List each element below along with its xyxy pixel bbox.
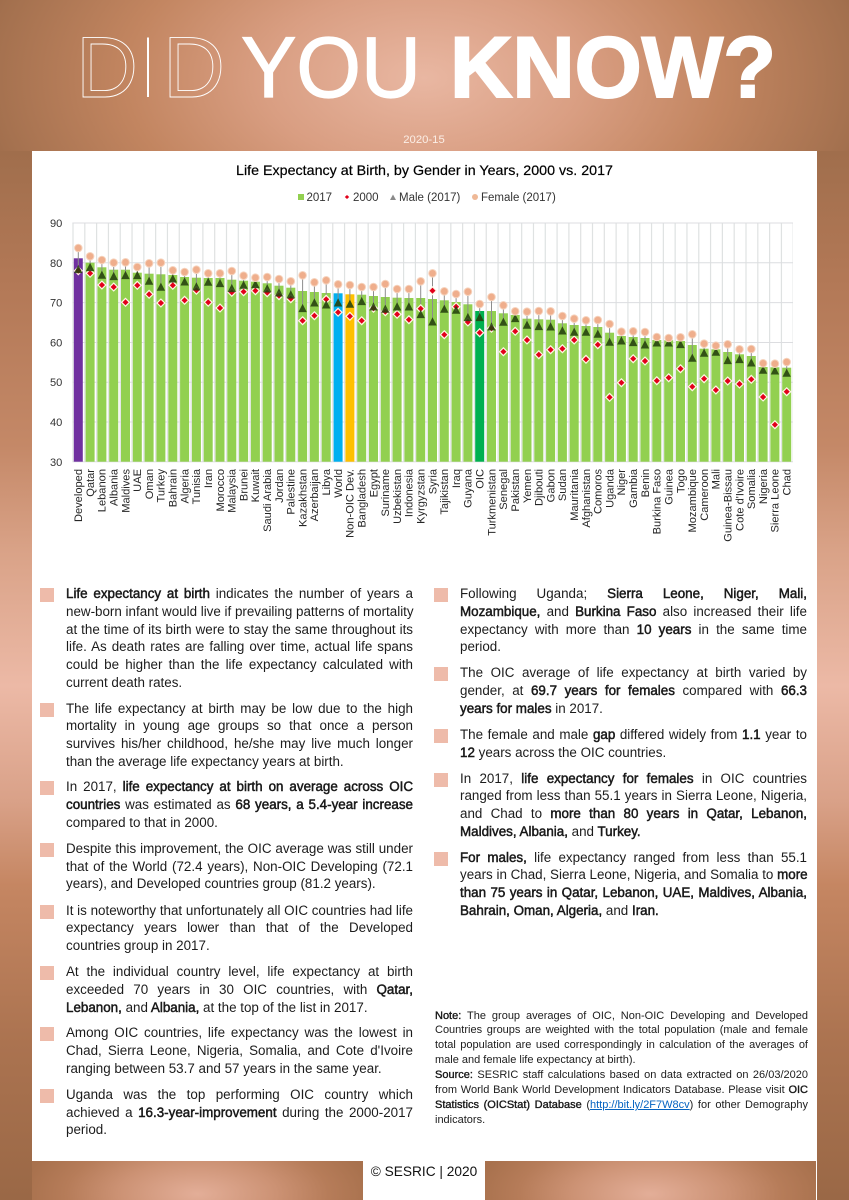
text block: following Uganda: expectancy with more than 10 years in the same time	[460, 622, 807, 637]
column: Bahrain	[168, 266, 177, 462]
x axis country labels: Cameroon	[699, 469, 711, 521]
column: Iraq	[452, 290, 461, 462]
x axis country labels: UAE	[132, 469, 144, 492]
column: Uganda	[605, 320, 614, 462]
footer credit: © SESRIC | 2020	[371, 1164, 477, 1179]
column: World	[334, 280, 343, 462]
text block: young age mortality: than the average life expectancy years at birth.	[66, 754, 344, 769]
x axis country labels: Chad	[782, 469, 794, 496]
text block: following Uganda: Following Uganda; Sierra Leone, Niger, Mali,	[460, 586, 807, 601]
chart title: Life Expectancy at Birth, by Gender in Years, 2000 vs. 2017	[236, 162, 613, 178]
text block: lowest countries: ranging between 53.7 and 57 years in the same year.	[66, 1061, 382, 1076]
text block: following Uganda: period.	[460, 639, 501, 654]
column: Egypt	[369, 283, 378, 462]
text block: young age mortality: mortality in young age groups so that once a person	[66, 718, 413, 733]
x axis country labels: Algeria	[179, 468, 191, 504]
column: Comoros	[593, 316, 602, 462]
note and source: total population are used correspondingly in calculation of the averages of	[435, 1039, 808, 1051]
x axis country labels: Egypt	[368, 469, 380, 497]
text block: following Uganda	[434, 586, 807, 654]
bars and markers	[74, 244, 791, 462]
x axis country labels: OIC	[474, 469, 486, 489]
text block: lowest countries	[40, 1025, 413, 1076]
x axis country labels: Suriname	[380, 469, 392, 516]
x axis country labels: Nigeria	[758, 468, 770, 504]
column: Malaysia	[227, 267, 236, 462]
x axis country labels: Palestine	[286, 469, 298, 515]
column: Albania	[109, 259, 118, 462]
column: Kazakhstan	[298, 272, 307, 462]
text block: gender average	[434, 665, 807, 716]
note and source: indicators.	[435, 1114, 485, 1126]
column: Somalia	[747, 345, 756, 462]
x axis country labels: Somalia	[746, 468, 758, 509]
x axis country labels: Guinea-Bissau	[722, 469, 734, 542]
column: Syria	[428, 270, 437, 462]
x axis country labels	[73, 468, 794, 542]
column: Sudan	[558, 312, 567, 462]
legend: Female (2017)	[481, 192, 556, 204]
column: Mauritania	[570, 315, 579, 462]
column: Tunisia	[192, 266, 201, 462]
text block: females: and Chad to more than 80 years in Qatar, Lebanon,	[460, 806, 807, 821]
text block: definition: at the time of its birth were to stay the same throughout its	[66, 622, 413, 637]
column: Uzbekistan	[393, 285, 402, 462]
column: Chad	[782, 358, 791, 462]
x axis country labels: Mali	[711, 469, 723, 489]
text block: gender gap	[434, 727, 807, 760]
x axis country labels: Mauritania	[569, 468, 581, 521]
text block: lower than developed: countries group in 2017.	[66, 938, 210, 953]
y axis labels: 60	[50, 338, 62, 350]
x axis country labels: Gambia	[628, 468, 640, 508]
column: Cote d'Ivoire	[735, 346, 744, 462]
column: Sierra Leone	[770, 360, 779, 462]
text block: males: than 75 years in Qatar, Lebanon, UAE, Maldives, Albania,	[460, 885, 807, 900]
x axis country labels: Afghanistan	[581, 469, 593, 528]
x axis country labels: Pakistan	[510, 469, 522, 512]
column: UAE	[133, 263, 142, 462]
title: I	[145, 20, 151, 116]
title: D	[76, 20, 138, 116]
title: YOU	[241, 20, 421, 116]
y axis labels: 50	[50, 377, 62, 389]
text block: males	[434, 850, 808, 918]
text block: group comparison: Despite this improvement, the OIC average was still under	[66, 841, 413, 856]
column: Senegal	[499, 302, 508, 462]
text block: definition: life. As death rates are falling over time, actual life spans	[66, 639, 413, 654]
note and source	[435, 1010, 808, 1126]
x axis country labels: Malaysia	[227, 468, 239, 513]
column: Bangladesh	[357, 283, 366, 462]
x axis country labels: Yemen	[522, 469, 534, 503]
text block: country level: At the individual country level, life expectancy at birth	[66, 964, 413, 979]
column: Turkey	[156, 259, 165, 462]
x axis country labels: Tunisia	[191, 468, 203, 504]
column: OIC	[475, 300, 484, 462]
x axis country labels: Uzbekistan	[392, 469, 404, 524]
column: Cameroon	[700, 340, 709, 462]
text block: males: years in Chad, Sierra Leone, Nigeria, and Somalia to more	[460, 867, 808, 882]
text block: group comparison: that of the World (72.4 years), Non-OIC Developing (72.1	[66, 859, 413, 874]
x axis country labels: Indonesia	[404, 468, 416, 517]
x axis country labels: Brunei	[238, 469, 250, 501]
text block: Uganda: achieved a 16.3-year-improvement during the 2000-2017	[66, 1105, 413, 1120]
right side strip	[817, 151, 849, 1200]
column: Gambia	[629, 328, 638, 462]
column: Djibouti	[534, 307, 543, 462]
x axis country labels: Tajikistan	[439, 469, 451, 515]
x axis country labels: Turkmenistan	[486, 469, 498, 536]
x axis country labels: Iraq	[451, 469, 463, 488]
column: Brunei	[239, 272, 248, 462]
note and source: from World Bank World Development Indicators Database. Please visit OIC	[435, 1084, 808, 1096]
x axis country labels: Iran	[203, 469, 215, 488]
legend: 2000	[353, 192, 379, 204]
x axis country labels: Syria	[427, 468, 439, 494]
column: Kuwait	[251, 274, 260, 462]
note and source: Note: The group averages of OIC, Non-OIC Developing and Developed	[435, 1010, 808, 1022]
x axis country labels: Non-OIC Dev.	[345, 469, 357, 538]
column: Non-OIC Dev.	[345, 281, 354, 462]
text block: definition: could be higher than the life expectancy calculated with	[66, 657, 413, 672]
x axis country labels: Bahrain	[168, 469, 180, 507]
y axis labels: 70	[50, 298, 62, 310]
x axis country labels: Comoros	[593, 469, 605, 514]
x axis country labels: Djibouti	[534, 469, 546, 506]
footer band left	[32, 1161, 363, 1200]
column: Iran	[204, 270, 213, 462]
x axis country labels: Benin	[640, 469, 652, 497]
text block: lower than developed: expectancy years lower than that of the Developed	[66, 920, 413, 935]
x axis country labels: World	[333, 469, 345, 498]
text block: lowest countries: Among OIC countries, life expectancy was the lowest in	[66, 1025, 413, 1040]
x axis country labels: Albania	[108, 468, 120, 506]
column: Guinea-Bissau	[723, 340, 732, 462]
text block: OIC average: In 2017, life expectancy at birth on average across OIC	[66, 779, 413, 794]
column: Lebanon	[97, 256, 106, 462]
text block: gender gap: The female and male gap differed widely from 1.1 year to	[460, 727, 807, 742]
text block: definition: current death rates.	[66, 675, 182, 690]
column: Morocco	[216, 270, 224, 462]
column: Togo	[676, 334, 685, 462]
title: KNOW?	[450, 20, 776, 116]
column: Libya	[322, 276, 331, 462]
text block: group comparison	[40, 841, 413, 891]
y axis labels: 90	[50, 218, 62, 230]
column: Indonesia	[404, 285, 413, 462]
note and source: Statistics (OICStat) Database (http://bit.ly/2F7W8cv) for other Demography	[435, 1099, 808, 1111]
text block: males: Bahrain, Oman, Algeria, and Iran.	[460, 903, 659, 918]
x axis country labels: Guinea	[664, 468, 676, 505]
column: Mali	[711, 342, 720, 462]
text block: Uganda: period.	[66, 1122, 107, 1137]
note and source: Countries groups are weighted with the total population (male and female	[435, 1024, 808, 1036]
footer credit	[363, 1161, 485, 1200]
text block: young age mortality: survives his/her childhood, he/she may live much longer	[66, 736, 413, 751]
x axis country labels: Kyrgyzstan	[416, 469, 428, 524]
white content panel	[32, 152, 816, 1162]
x axis country labels: Sierra Leone	[770, 469, 782, 533]
column: Oman	[145, 260, 154, 462]
column: Azerbaijan	[310, 278, 319, 462]
x axis country labels: Gabon	[545, 469, 557, 502]
x axis country labels: Mozambique	[687, 469, 699, 533]
text block: females	[434, 771, 807, 840]
text block: following Uganda: Mozambique, and Burkina Faso also increased their life	[460, 604, 807, 619]
column: Benin	[640, 328, 650, 462]
footer band right	[485, 1161, 816, 1200]
y axis labels: 30	[50, 457, 62, 469]
y axis labels: 40	[50, 417, 62, 429]
text block: lowest countries: Chad, Sierra Leone, Nigeria, Somalia, and Cote d'Ivoire	[66, 1043, 413, 1058]
x axis country labels: Turkey	[156, 469, 168, 502]
text block: females: Maldives, Albania, and Turkey.	[460, 824, 641, 839]
column: Yemen	[522, 308, 532, 462]
text block: females: ranged from less than 55.1 years in Sierra Leone, Nigeria,	[460, 788, 807, 803]
note and source: male and female life expectancy at birth).	[435, 1054, 636, 1066]
issue number: 2020-15	[403, 134, 445, 146]
column: Kyrgyzstan	[416, 278, 425, 462]
text block: country level	[40, 964, 413, 1015]
column: Tajikistan	[440, 288, 449, 462]
x axis country labels: Uganda	[604, 468, 616, 508]
column: Gabon	[546, 308, 555, 462]
text block: males: For males, life expectancy ranged from less than 55.1	[460, 850, 807, 865]
text block: OIC average: countries was estimated as 68 years, a 5.4-year increase	[66, 797, 413, 812]
column: Guinea	[664, 334, 673, 462]
x axis country labels: Burkina Faso	[652, 469, 664, 534]
x axis country labels: Morocco	[215, 469, 227, 512]
x axis country labels: Lebanon	[97, 469, 109, 512]
x axis country labels: Bangladesh	[356, 469, 368, 528]
note and source: Source: SESRIC staff calculations based on data extracted on 26/03/2020	[435, 1069, 808, 1081]
x axis country labels: Kuwait	[250, 469, 262, 502]
x axis country labels: Maldives	[120, 469, 132, 513]
title	[76, 20, 776, 146]
column: Niger	[617, 328, 626, 462]
text block: gender average: The OIC average of life expectancy at birth varied by	[460, 665, 807, 680]
text block: country level: Lebanon, and Albania, at the top of the list in 2017.	[66, 1000, 368, 1015]
x axis country labels: Jordan	[274, 469, 286, 503]
x axis country labels: Guyana	[463, 468, 475, 508]
text block: young age mortality: The life expectancy at birth may be low due to the high	[66, 701, 413, 716]
column: Suriname	[381, 280, 390, 462]
column: Saudi Arabia	[263, 273, 272, 462]
text block: country level: exceeded 70 years in 30 OIC countries, with Qatar,	[66, 982, 413, 997]
legend	[298, 192, 556, 204]
text block: lower than developed	[40, 903, 413, 953]
text block: Uganda: Uganda was the top performing OIC country which	[66, 1087, 413, 1102]
text block: lower than developed: It is noteworthy that unfortunately all OIC countries had life	[66, 903, 413, 918]
title: D	[163, 20, 225, 116]
text block: definition	[40, 586, 414, 690]
legend: 2017	[306, 192, 332, 204]
x axis country labels: Kazakhstan	[297, 469, 309, 527]
x axis country labels: Azerbaijan	[309, 469, 321, 521]
x axis country labels: Cote d'Ivoire	[734, 469, 746, 531]
x axis country labels: Qatar	[85, 469, 97, 497]
x axis country labels: Sudan	[557, 469, 569, 501]
column: Palestine	[286, 278, 295, 462]
text block: gender gap: 12 years across the OIC countries.	[460, 745, 666, 760]
column: Algeria	[180, 268, 189, 462]
text block: definition: Life expectancy at birth indicates the number of years a	[66, 586, 413, 601]
text block: gender average: years for males in 2017.	[460, 701, 603, 716]
text block: gender average: gender, at 69.7 years for females compared with 66.3	[460, 683, 807, 698]
x axis country labels: Saudi Arabia	[262, 468, 274, 532]
column: Burkina Faso	[652, 333, 661, 462]
column: Maldives	[121, 258, 130, 462]
legend: Male (2017)	[399, 192, 461, 204]
column: Turkmenistan	[487, 293, 496, 462]
column: Afghanistan	[582, 316, 590, 462]
left side strip	[0, 151, 32, 1200]
y axis labels	[50, 218, 62, 469]
x axis country labels: Togo	[675, 469, 687, 493]
column: Guyana	[463, 288, 472, 462]
column: Qatar	[86, 252, 95, 462]
chart panel	[50, 162, 794, 542]
text block: group comparison: years), and Developed countries group (81.2 years).	[66, 876, 376, 891]
text block: OIC average	[40, 779, 413, 830]
text block: females: In 2017, life expectancy for females in OIC countries	[460, 771, 807, 786]
x axis country labels: Oman	[144, 469, 156, 499]
x axis country labels: Libya	[321, 468, 333, 496]
text block: young age mortality	[40, 701, 413, 769]
column: Jordan	[274, 275, 284, 462]
y axis labels: 80	[50, 258, 62, 270]
column: Mozambique	[688, 330, 697, 462]
x axis country labels: Developed	[73, 469, 85, 522]
x axis country labels: Senegal	[498, 469, 510, 510]
text block: OIC average: compared to that in 2000.	[66, 815, 218, 830]
x axis country labels: Niger	[616, 469, 628, 496]
column: Pakistan	[511, 308, 520, 462]
text block: definition: new-born infant would live if prevailing patterns of mortality	[66, 604, 414, 619]
text block: Uganda	[40, 1087, 413, 1137]
header background	[0, 0, 849, 151]
column: Developed	[74, 244, 83, 462]
column: Nigeria	[759, 360, 768, 462]
